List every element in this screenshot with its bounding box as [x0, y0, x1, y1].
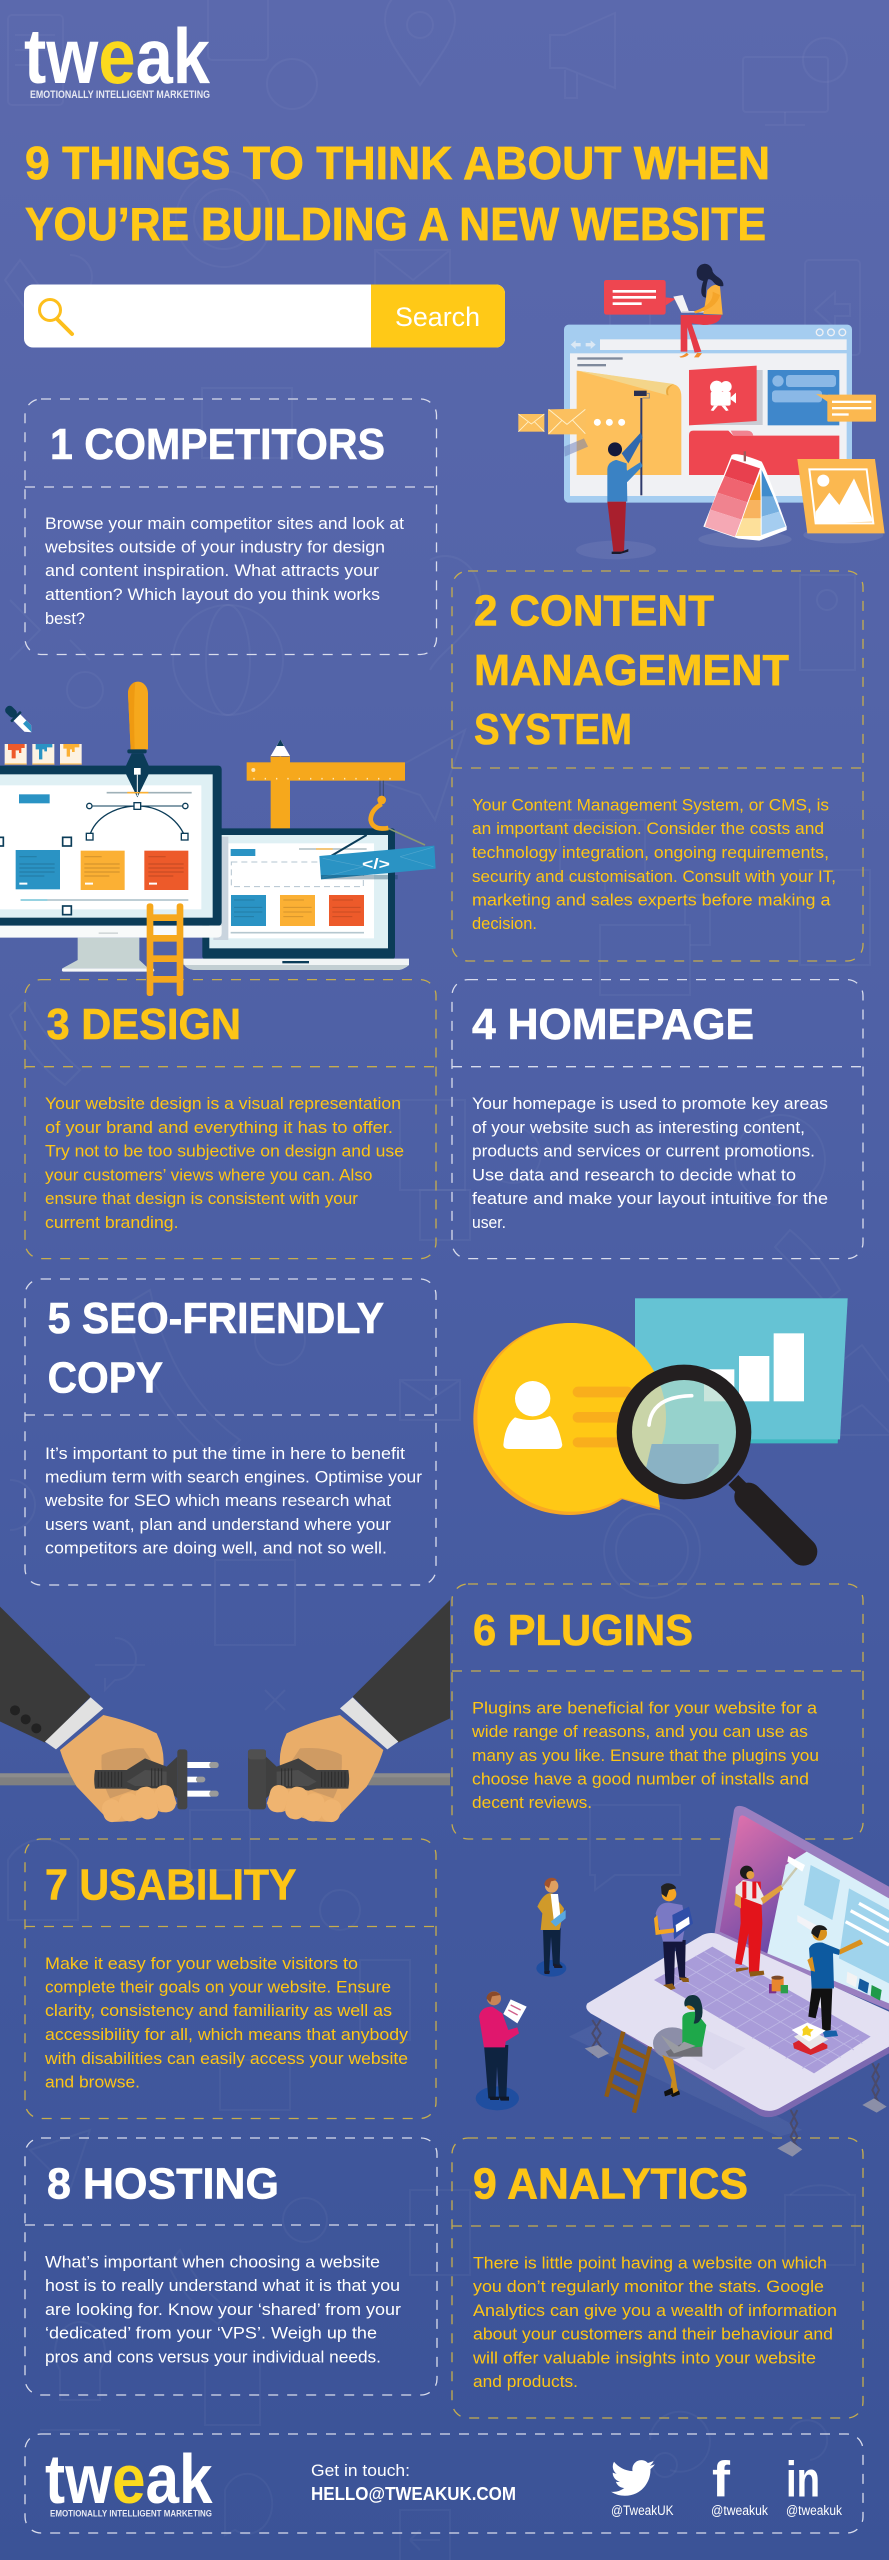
text block: usability body: clarity, consistency and familiarity as well as	[45, 2002, 392, 2020]
text block: competitors body: Browse your main competitor sites and look at	[45, 515, 404, 533]
panel: 5 seo-friendly copy	[25, 1279, 436, 1585]
text block: cms body: decision.	[472, 915, 537, 933]
search bar: Search	[395, 302, 480, 332]
text block: seo body: It’s important to put the time in here to benefit	[45, 1445, 405, 1463]
icon: twitter	[611, 2460, 674, 2518]
panel: 9 analytics	[452, 2138, 863, 2418]
heading: 8 hosting: 8 HOSTING	[47, 2159, 279, 2208]
heading: 2 content management system: MANAGEMENT	[474, 646, 789, 695]
text block: design body	[45, 1095, 404, 1232]
illustration: isometric laptop with people	[476, 1806, 889, 2157]
text block: plugins body: many as you like. Ensure that the plugins you	[472, 1747, 819, 1765]
illustration: browser window with designers	[518, 264, 885, 559]
heading: 4 homepage: 4 HOMEPAGE	[472, 1000, 754, 1049]
contact details: HELLO@TWEAKUK.COM	[311, 2484, 516, 2504]
text block: cms body: Your Content Management System, or CMS, is	[472, 796, 829, 814]
text block: hosting body: pros and cons versus your individual needs.	[45, 2348, 381, 2366]
panel: 8 hosting	[25, 2138, 437, 2395]
search bar	[24, 284, 505, 348]
logo: tweak footer: tweak	[45, 2440, 213, 2518]
illustration: hands connecting plugs	[0, 1600, 450, 1824]
text block: homepage body: feature and make your layout intuitive for the	[472, 1190, 828, 1208]
text block: hosting body: are looking for. Know your ‘shared’ from your	[45, 2301, 402, 2319]
text block: usability body: Make it easy for your website visitors to	[45, 1955, 358, 1973]
text block: plugins body: wide range of reasons, and you can use as	[471, 1723, 808, 1741]
icon: linkedin: in	[786, 2452, 820, 2508]
heading: 5 seo-friendly copy	[48, 1294, 384, 1402]
text block: usability body: and browse.	[45, 2074, 140, 2092]
text block: analytics body: will offer valuable insights into your website	[472, 2349, 816, 2367]
text block: hosting body: ‘dedicated’ from your ‘VPS’. Weigh up the	[45, 2325, 377, 2343]
text block: hosting body: What’s important when choosing a website	[45, 2253, 380, 2271]
title	[25, 137, 770, 250]
text block: design body: current branding.	[45, 1214, 178, 1232]
text block: seo body: website for SEO which means research what	[44, 1492, 391, 1510]
text block: usability body: with disabilities can easily access your website	[44, 2050, 408, 2068]
text block: seo body: competitors are doing well, and not so well.	[45, 1540, 387, 1558]
heading: 2 content management system: SYSTEM	[474, 705, 632, 754]
panel: 1 competitors	[25, 399, 436, 654]
heading: 5 seo-friendly copy: COPY	[48, 1354, 163, 1402]
text block: analytics body: There is little point having a website on which	[473, 2254, 827, 2272]
panel: 7 usability	[25, 1839, 436, 2118]
text block: usability body: accessibility for all, which means that anybody	[45, 2026, 409, 2044]
panel: footer	[25, 2434, 863, 2533]
heading: 2 content management system	[474, 587, 789, 754]
text block: cms body: security and customisation. Consult with your IT,	[472, 868, 836, 886]
heading: 5 seo-friendly copy: 5 SEO-FRIENDLY	[48, 1294, 384, 1343]
icon: facebook: @tweakuk	[711, 2503, 768, 2518]
panel: 2 content management system	[452, 571, 863, 961]
text block: competitors body: attention? Which layout do you think works	[45, 586, 380, 604]
text block: cms body: technology integration, ongoing requirements,	[472, 844, 829, 862]
panel: 6 plugins	[452, 1584, 863, 1839]
heading: 2 content management system: 2 CONTENT	[474, 587, 714, 636]
text block: usability body	[44, 1955, 409, 2092]
text block: analytics body: Analytics can give you a wealth of information	[473, 2302, 837, 2320]
text block: cms body: an important decision. Consider the costs and	[472, 820, 824, 838]
text block: homepage body: Your homepage is used to promote key areas	[472, 1095, 828, 1113]
text block: hosting body: host is to really understand what it is that you	[45, 2277, 400, 2295]
heading: 9 analytics: 9 ANALYTICS	[473, 2159, 748, 2208]
illustration: monitor and laptop under construction	[0, 682, 436, 996]
text block: usability body: complete their goals on your website. Ensure	[45, 1979, 391, 1997]
icon: linkedin: @tweakuk	[786, 2503, 842, 2518]
heading: 7 usability: 7 USABILITY	[45, 1860, 296, 1909]
icon: twitter: @TweakUK	[611, 2503, 674, 2518]
text block: design body: ensure that design is consistent with your	[45, 1190, 359, 1208]
logo: tweak: tweak	[24, 12, 211, 100]
text block: seo body	[44, 1445, 423, 1558]
text block: hosting body	[45, 2253, 402, 2366]
text block: cms body: marketing and sales experts before making a	[472, 892, 831, 910]
text block: competitors body: websites outside of your industry for design	[44, 538, 385, 556]
text block: design body: of your brand and everything it has to offer.	[45, 1119, 393, 1137]
text block: analytics body: about your customers and their behaviour and	[473, 2326, 833, 2344]
text block: analytics body	[472, 2254, 837, 2391]
contact details: Get in touch:	[311, 2461, 410, 2480]
heading: 3 design: 3 DESIGN	[46, 1000, 241, 1049]
icon: facebook	[711, 2452, 768, 2518]
text block: homepage body: products and services or current promotions.	[472, 1142, 815, 1160]
panel: 3 design	[25, 980, 436, 1259]
text block: design body: Try not to be too subjective on design and use	[45, 1142, 404, 1160]
logo: tweak footer: EMOTIONALLY INTELLIGENT MARKETING	[50, 2508, 212, 2518]
title: YOU’RE BUILDING A NEW WEBSITE	[25, 198, 766, 250]
text block: plugins body	[471, 1699, 819, 1812]
text block: plugins body: choose have a good number of installs and	[472, 1771, 809, 1789]
text block: competitors body	[44, 515, 404, 628]
illustration: speech bubble, chart and magnifying glass	[473, 1298, 848, 1552]
text block: competitors body: and content inspiration. What attracts your	[45, 562, 380, 580]
text block: seo body: medium term with search engines. Optimise your	[45, 1468, 423, 1486]
title: 9 THINGS TO THINK ABOUT WHEN	[25, 137, 770, 189]
text block: plugins body: Plugins are beneficial for your website for a	[472, 1699, 818, 1717]
icon: right hand and socket	[248, 1600, 450, 1824]
text block: design body: your customers’ views where you can. Also	[45, 1167, 373, 1185]
text block: plugins body: decent reviews.	[472, 1794, 592, 1812]
logo: tweak: EMOTIONALLY INTELLIGENT MARKETING	[30, 89, 210, 101]
text block: homepage body	[472, 1095, 828, 1232]
text block: seo body: users want, plan and understand where your	[45, 1516, 392, 1534]
heading: 1 competitors: 1 COMPETITORS	[50, 420, 385, 469]
text block: cms body	[472, 796, 836, 933]
icon: left hand and plug	[0, 1600, 219, 1824]
icon: linkedin	[786, 2452, 842, 2518]
text block: competitors body: best?	[45, 610, 85, 628]
text block: design body: Your website design is a visual representation	[45, 1095, 401, 1113]
heading: 6 plugins: 6 PLUGINS	[473, 1606, 693, 1655]
icon: facebook: f	[712, 2452, 730, 2508]
text block: homepage body: user.	[472, 1214, 506, 1232]
panel: 4 homepage	[452, 980, 863, 1259]
text block: analytics body: and products.	[473, 2373, 578, 2391]
text block: homepage body: Use data and research to decide what to	[472, 1167, 796, 1185]
text block: analytics body: you don’t regularly monitor the stats. Google	[473, 2278, 824, 2296]
illustration: monitor and laptop under construction: </>	[362, 857, 390, 873]
text block: homepage body: of your website such as interesting content,	[472, 1119, 805, 1137]
contact details	[311, 2461, 516, 2504]
